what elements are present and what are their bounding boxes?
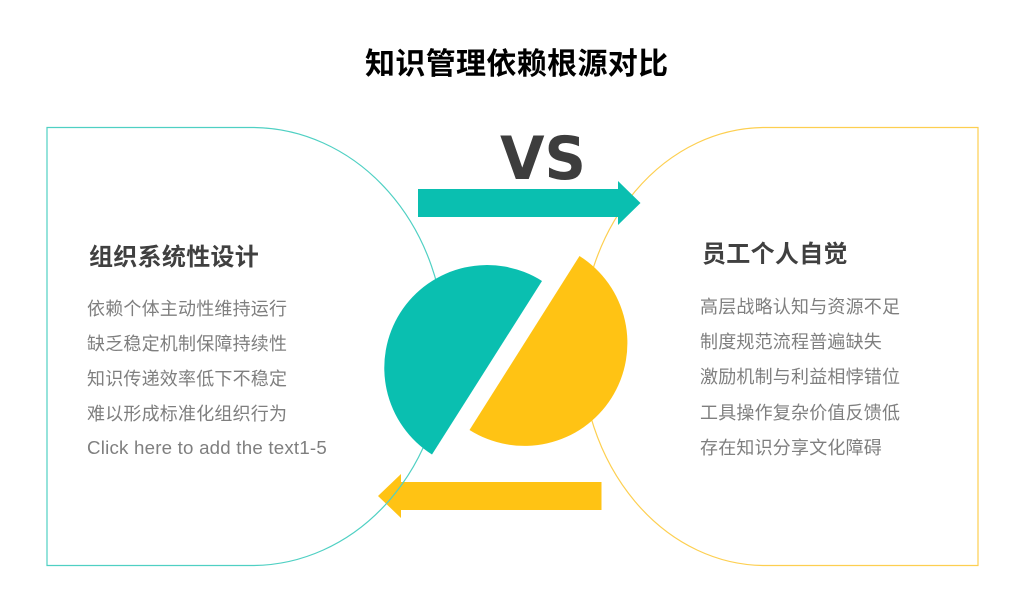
list: left: 知识传递效率低下不稳定 (87, 369, 287, 389)
list: right: 制度规范流程普遍缺失 (700, 332, 882, 352)
heading: right: 员工个人自觉 (702, 241, 848, 268)
panel text: right (700, 241, 900, 458)
list: left: Click here to add the text1-5 (87, 438, 327, 458)
list: right: 高层战略认知与资源不足 (700, 297, 900, 317)
list: right: 存在知识分享文化障碍 (700, 438, 882, 458)
half circle: yellow (470, 256, 627, 446)
list: left: 依赖个体主动性维持运行 (87, 299, 287, 319)
list: left: 缺乏稳定机制保障持续性 (87, 334, 287, 354)
half circle: teal (384, 265, 542, 454)
heading: left: 组织系统性设计 (89, 244, 259, 271)
panel: left outline (47, 128, 445, 566)
list: left (87, 299, 327, 458)
list: left: 难以形成标准化组织行为 (87, 404, 287, 424)
VS label: VS (500, 124, 586, 194)
list: right: 激励机制与利益相悖错位 (700, 367, 900, 387)
list: right: 工具操作复杂价值反馈低 (700, 403, 900, 423)
panel: right outline (581, 128, 978, 566)
panel text: left (87, 244, 327, 458)
arrow: yellow left (378, 474, 602, 518)
list: right (700, 297, 900, 458)
arrow: teal right (418, 181, 640, 225)
title: 知识管理依赖根源对比 (365, 48, 668, 81)
